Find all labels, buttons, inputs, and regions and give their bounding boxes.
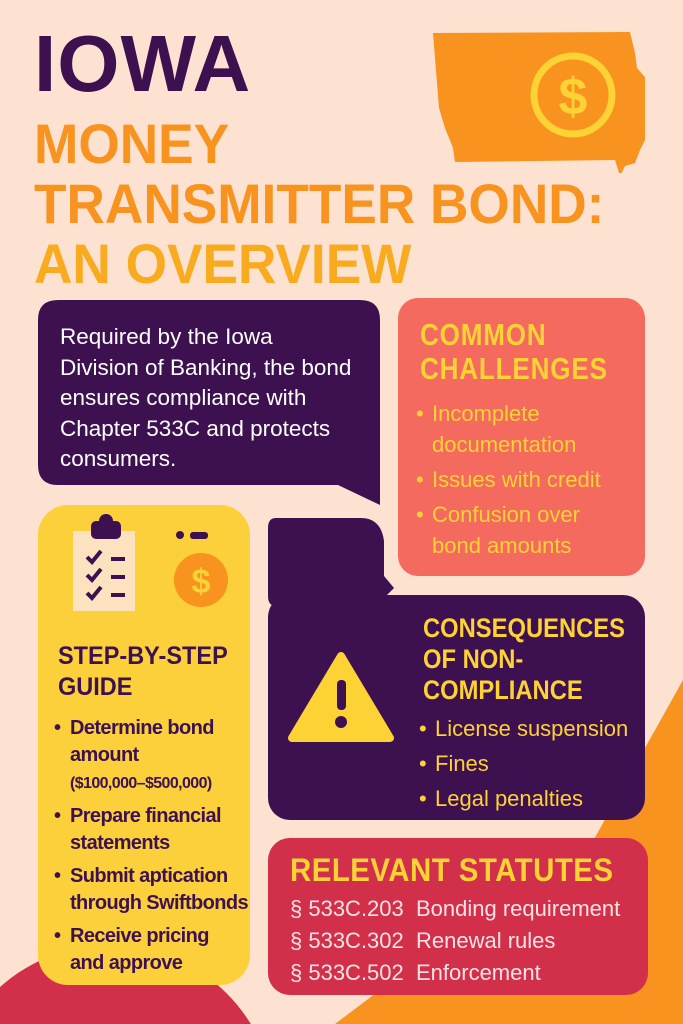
panel: common challenges: Issues with credit: [432, 467, 601, 492]
panel: relevant statutes: [268, 838, 648, 995]
panel: relevant statutes: § 533C.502 Enforcement: [290, 960, 541, 985]
panel: relevant statutes: RELEVANT STATUTES: [290, 852, 613, 888]
panel: step-by-step guide: [38, 505, 250, 985]
text: intro: [60, 324, 351, 471]
panel: common challenges: [398, 298, 645, 576]
panel: common challenges: COMMON: [420, 317, 547, 352]
panel: consequences of non-compliance: Fines: [435, 751, 489, 776]
panel: step-by-step guide: statements: [70, 832, 170, 854]
panel: step-by-step guide: Prepare financial: [70, 805, 221, 827]
panel: consequences of non-compliance: License suspension: [435, 716, 628, 741]
title: IOWA: [34, 19, 251, 108]
panel: common challenges: Incomplete: [432, 401, 540, 426]
panel: common challenges: Confusion over: [432, 502, 580, 527]
panel: consequences of non-compliance: COMPLIANCE: [423, 675, 583, 705]
panel: step-by-step guide: and approve: [70, 952, 182, 974]
panel: step-by-step guide: Determine bond: [70, 717, 214, 739]
panel: consequences of non-compliance: Legal penalties: [435, 786, 583, 811]
panel: step-by-step guide: through Swiftbonds: [70, 892, 248, 914]
text: intro: consumers.: [60, 446, 176, 471]
panel: intro speech bubble: [38, 300, 380, 505]
text: intro: Chapter 533C and protects: [60, 416, 330, 440]
title: AN OVERVIEW: [34, 232, 411, 295]
panel: relevant statutes: § 533C.302 Renewal rules: [290, 928, 555, 953]
icon: warning triangle: [288, 652, 394, 742]
text: intro: ensures compliance with: [60, 385, 306, 410]
panel: step-by-step guide: Receive pricing: [70, 925, 209, 947]
panel: consequences of non-compliance: OF NON-: [423, 644, 523, 674]
panel: step-by-step guide: amount: [70, 744, 139, 766]
panel: step-by-step guide: Submit aptication: [70, 865, 228, 887]
text: intro: Division of Banking, the bond: [60, 354, 351, 380]
panel: common challenges: bond amounts: [432, 533, 571, 558]
icon: Iowa map with coin: [433, 32, 645, 173]
panel: common challenges: documentation: [432, 432, 576, 457]
panel: consequences of non-compliance: [268, 595, 645, 820]
title: MONEY: [34, 112, 229, 175]
icon: clipboard with checks and coin: [73, 514, 228, 611]
panel: common challenges: CHALLENGES: [420, 351, 608, 386]
panel: relevant statutes: § 533C.203 Bonding requirement: [290, 896, 620, 921]
panel: step-by-step guide: STEP-BY-STEP: [58, 642, 228, 670]
panel: step-by-step guide: GUIDE: [58, 673, 132, 701]
text: intro: Required by the Iowa: [60, 324, 273, 349]
title: TRANSMITTER BOND:: [34, 172, 604, 235]
connector shape: [268, 518, 394, 605]
panel: consequences of non-compliance: CONSEQUENCES: [423, 613, 625, 643]
icon: Iowa map with coin: $: [559, 68, 588, 126]
title: [34, 19, 604, 295]
panel: step-by-step guide: ($100,000–$500,000): [70, 775, 212, 792]
icon: clipboard with checks and coin: $: [192, 563, 211, 601]
